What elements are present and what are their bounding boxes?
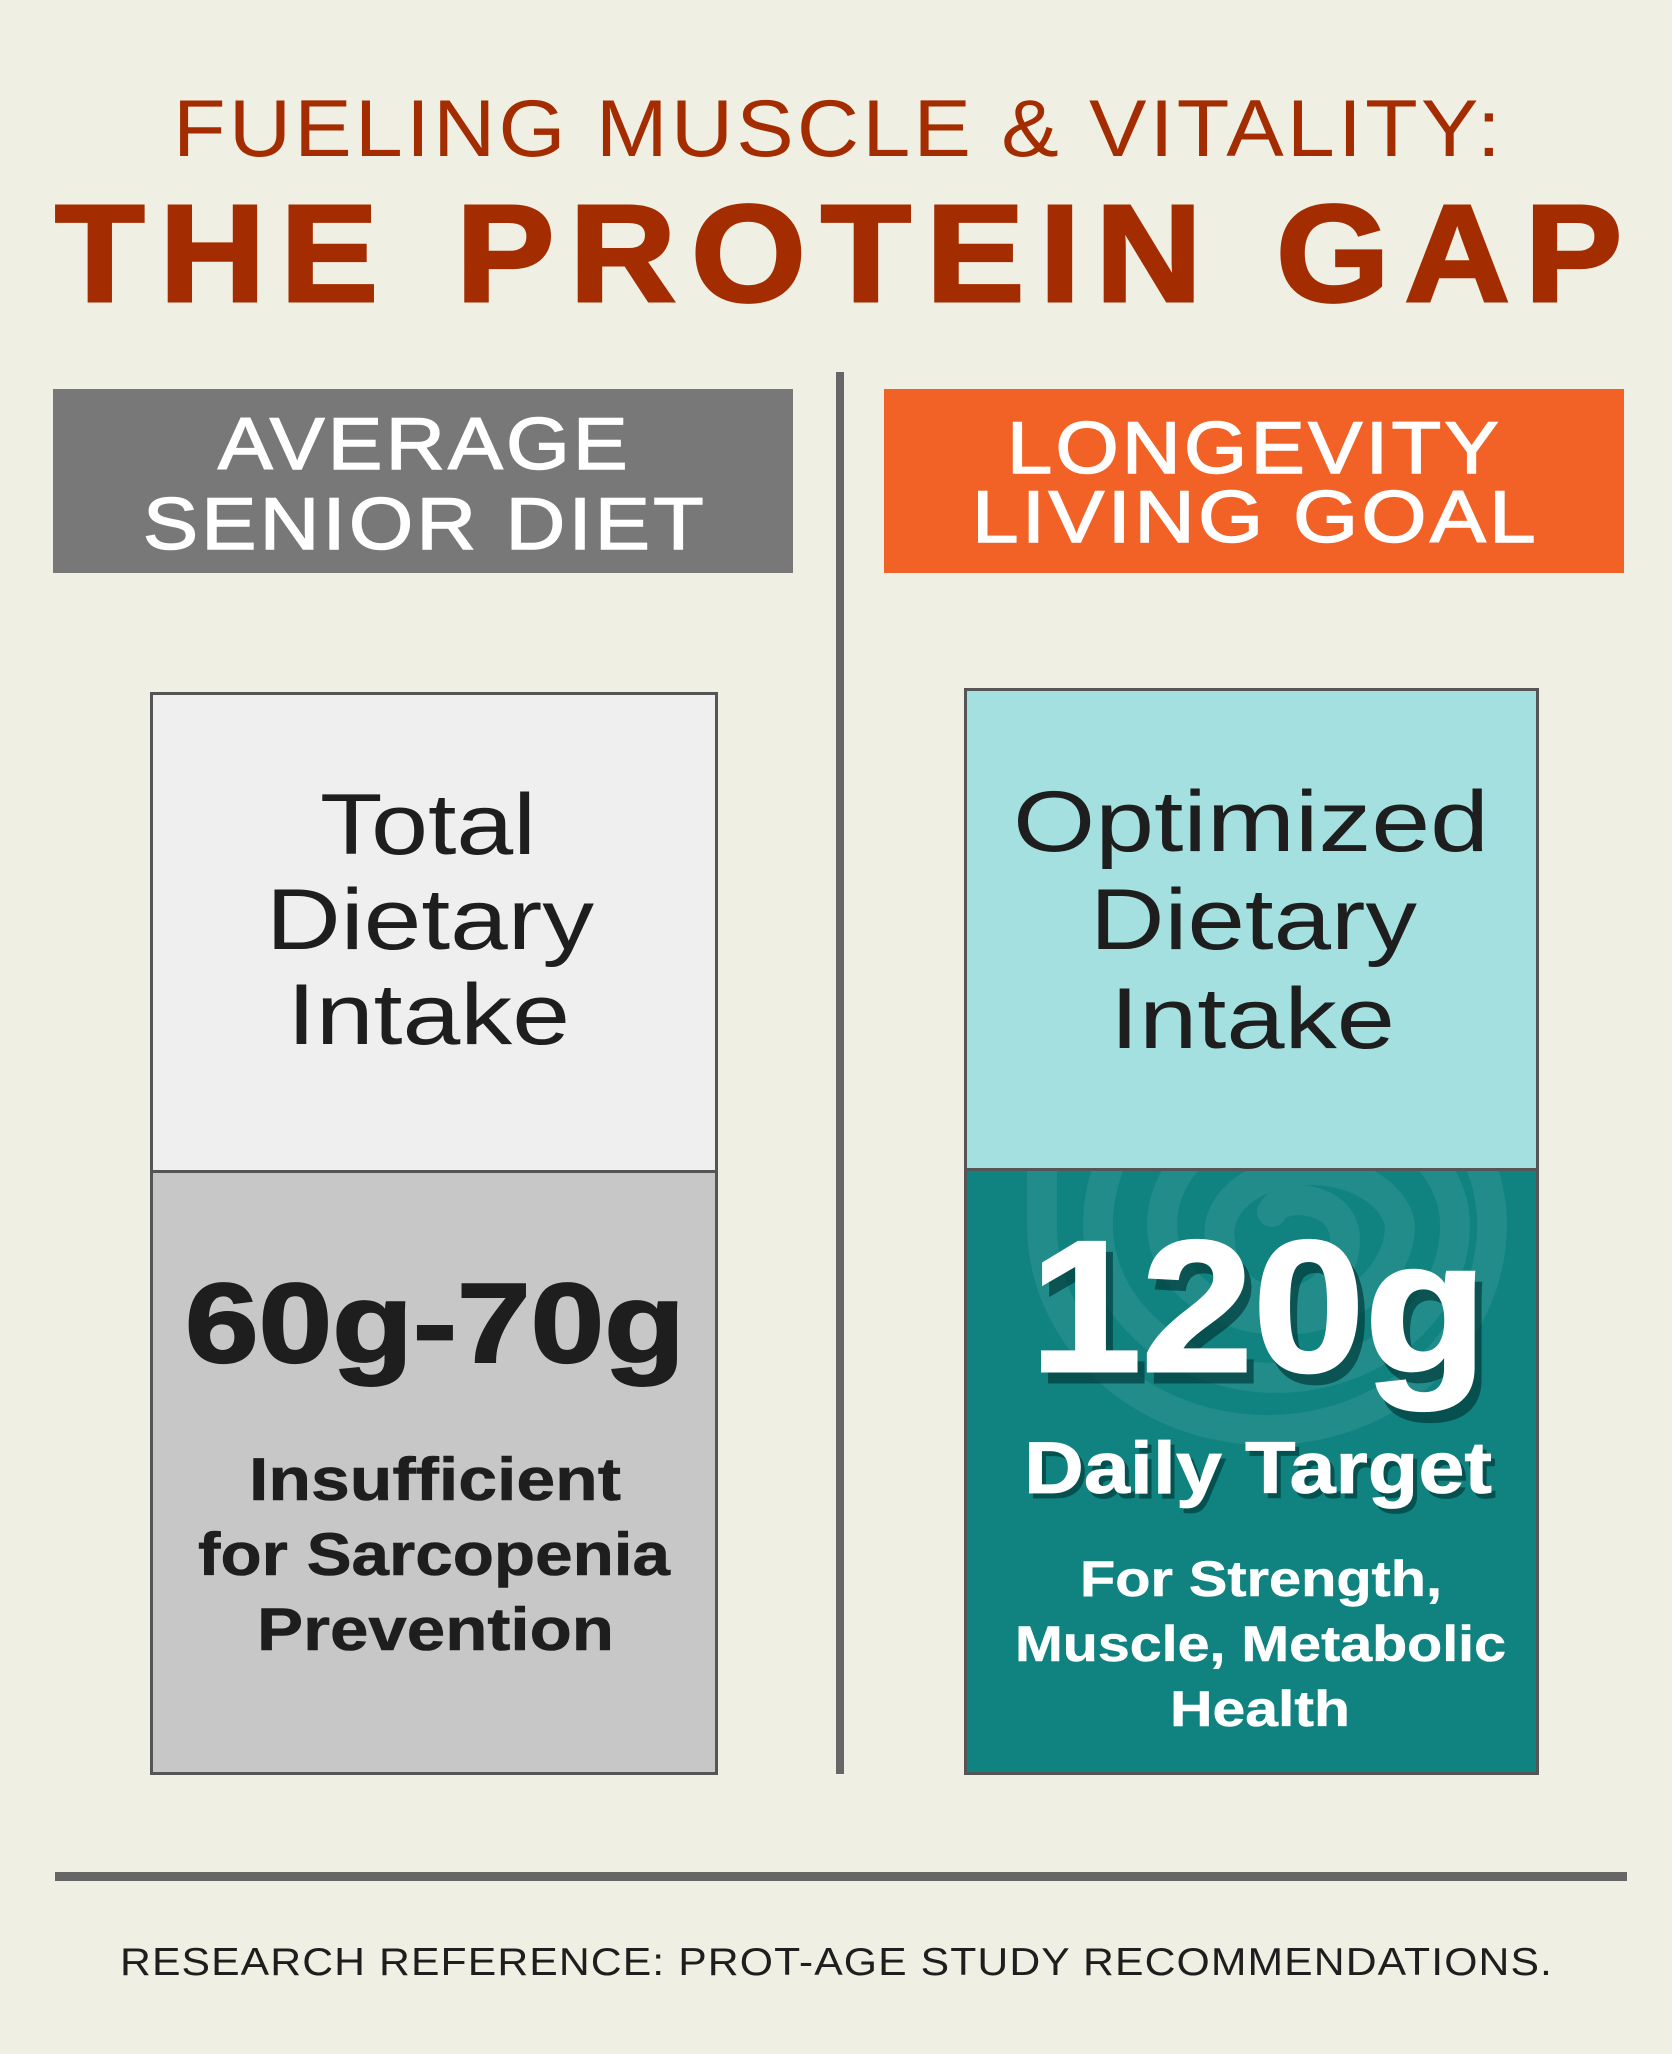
column header: longevity living goal: LONGEVITY bbox=[1007, 408, 1502, 489]
text block: benefits: Muscle, Metabolic bbox=[1015, 1616, 1506, 1672]
title line 2 bbox=[55, 177, 1637, 331]
icon: spiral watermark bbox=[1027, 1171, 1507, 1444]
footer rule bbox=[55, 1872, 1627, 1881]
panel section: optimized dietary intake: Optimized bbox=[1013, 774, 1489, 870]
text block: benefits bbox=[1015, 1551, 1506, 1737]
label: daily target: Daily Target bbox=[1024, 1428, 1492, 1509]
panel section: 60g-70g: 60g-70g bbox=[185, 1260, 685, 1386]
panel section: 60g-70g: Prevention bbox=[257, 1596, 614, 1663]
panel section: 60g-70g bbox=[152, 1172, 716, 1774]
column header: longevity living goal: LIVING GOAL bbox=[972, 477, 1539, 558]
panel section: 60g-70g: for Sarcopenia bbox=[198, 1521, 671, 1588]
center divider bbox=[836, 372, 844, 1774]
panel: longevity living goal bbox=[966, 690, 1538, 1774]
text block: benefits: Health bbox=[1170, 1681, 1350, 1737]
panel section: total dietary intake bbox=[152, 694, 716, 1172]
big number: 120g: 120g bbox=[1030, 1202, 1487, 1411]
panel section: total dietary intake: Total bbox=[320, 777, 536, 873]
column header: average senior diet: AVERAGE bbox=[218, 404, 631, 485]
panel section: optimized dietary intake: Dietary bbox=[1090, 872, 1417, 968]
text block: benefits: For Strength, bbox=[1080, 1551, 1442, 1607]
panel section: total dietary intake: Dietary bbox=[266, 872, 594, 968]
column header: average senior diet bbox=[53, 389, 793, 573]
panel section: 60g-70g: Insufficient bbox=[249, 1446, 621, 1513]
title bbox=[55, 84, 1637, 331]
panel section: optimized dietary intake bbox=[966, 690, 1538, 1170]
panel section: 120g daily target bbox=[964, 1171, 1539, 1775]
column header: longevity living goal bbox=[884, 389, 1624, 573]
panel section: optimized dietary intake: Intake bbox=[1110, 971, 1395, 1067]
title line 2: THE bbox=[55, 177, 393, 331]
title line 2: PROTEIN bbox=[456, 177, 1217, 331]
column header: average senior diet: SENIOR DIET bbox=[143, 484, 707, 565]
panel section: total dietary intake: Intake bbox=[287, 967, 570, 1063]
title line 1: FUELING MUSCLE & VITALITY: bbox=[173, 84, 1504, 174]
footer: research reference: RESEARCH REFERENCE: PROT-AGE STUDY RECOMMENDATIONS. bbox=[120, 1941, 1553, 1984]
panel: average senior diet bbox=[152, 694, 716, 1774]
title line 2: GAP bbox=[1276, 177, 1637, 331]
